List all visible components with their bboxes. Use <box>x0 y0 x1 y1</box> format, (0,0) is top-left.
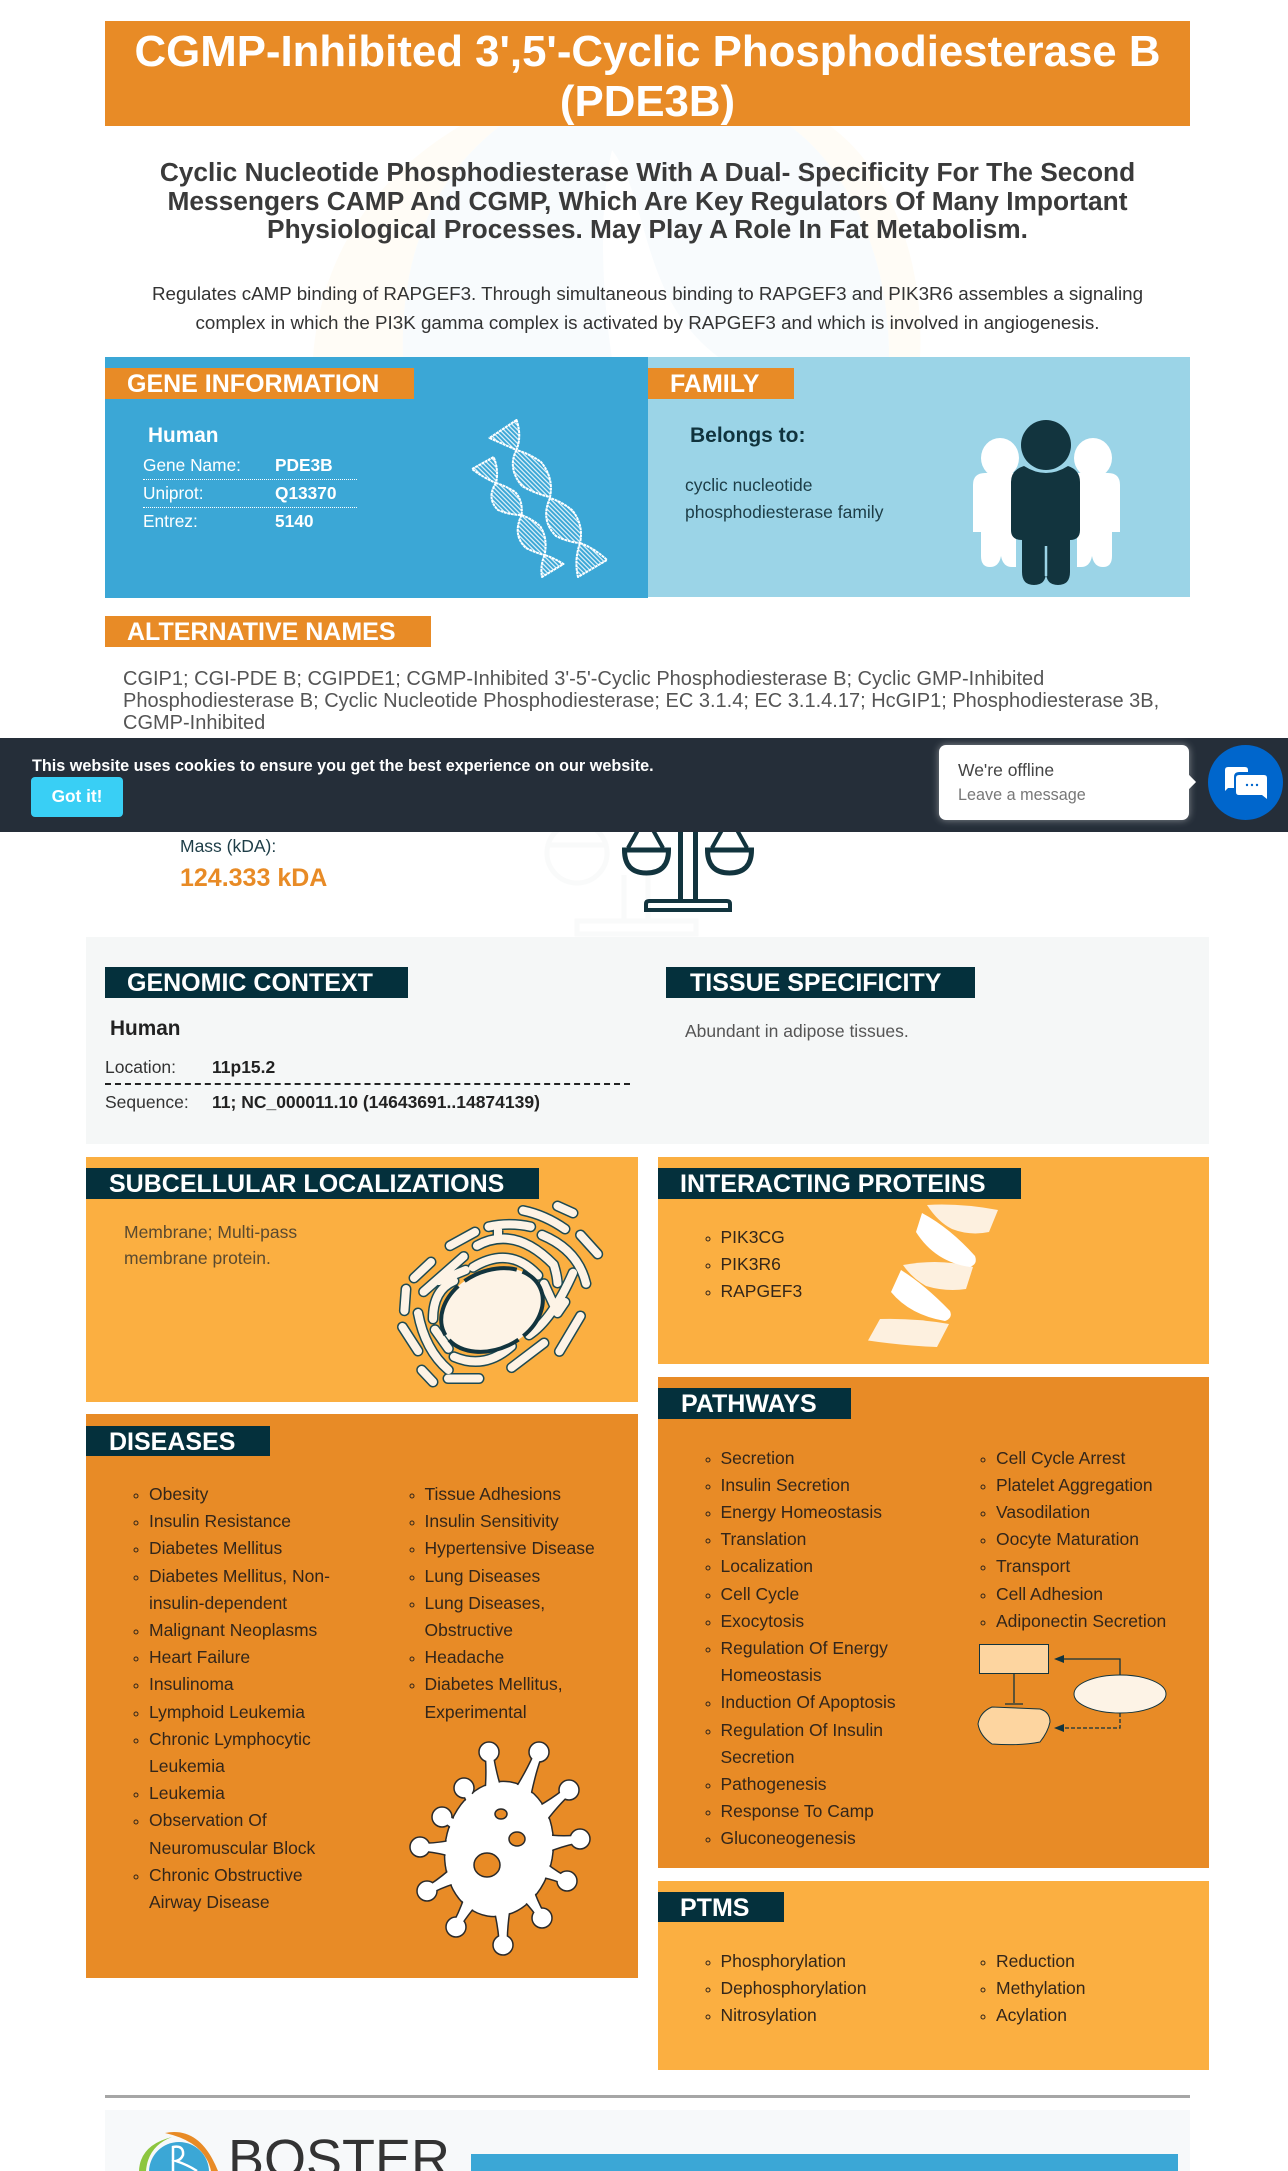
disease list: column 1: Diabetes Mellitus, Non- <box>149 1566 330 1586</box>
title: (PDE3B) <box>560 77 735 126</box>
panel: family <box>648 357 1190 597</box>
mass value: 124.333 kDA <box>180 864 327 892</box>
heading: family: FAMILY <box>670 370 759 398</box>
heading: pathways: PATHWAYS <box>681 1390 817 1418</box>
footer divider <box>105 2095 1190 2098</box>
family text <box>685 475 884 522</box>
gene name row <box>143 455 357 480</box>
gene name row: Gene Name: <box>143 455 241 475</box>
disease list: column 1: Insulin Resistance <box>149 1511 291 1531</box>
PTM list: column 1: Nitrosylation <box>720 2005 817 2025</box>
gene name row: PDE3B <box>275 455 333 475</box>
disease list: column 1: Obesity <box>149 1484 208 1504</box>
pathway list: column 1: Homeostasis <box>720 1665 822 1685</box>
pathway list: column 2: Vasodilation <box>996 1502 1090 1522</box>
chat prompt: Leave a message <box>958 786 1086 804</box>
disease list: column 2: Lung Diseases, <box>424 1593 545 1613</box>
pathway list: column 1: Insulin Secretion <box>720 1475 850 1495</box>
disease list: column 2 <box>410 1484 595 1722</box>
disease list: column 1: insulin-dependent <box>149 1593 287 1613</box>
entrez row: Entrez: <box>143 511 198 531</box>
family text: cyclic nucleotide <box>685 475 812 495</box>
localization text: Membrane; Multi-pass <box>124 1222 297 1242</box>
panel: interacting proteins <box>658 1157 1209 1364</box>
panel: footer <box>105 2110 1190 2171</box>
pathway list: column 1: Regulation Of Energy <box>720 1638 888 1658</box>
pathway list: column 1 <box>706 1448 896 1848</box>
icon: DNA helix <box>472 419 608 578</box>
location row: 11p15.2 <box>212 1057 275 1077</box>
heading: family <box>648 368 794 399</box>
pathway list: column 1: Regulation Of Insulin <box>720 1720 883 1740</box>
title: CGMP-Inhibited 3',5'-Cyclic Phosphodiesterase B <box>135 27 1160 76</box>
heading: tissue specificity: TISSUE SPECIFICITY <box>690 969 941 997</box>
location row: Location: <box>105 1057 176 1077</box>
bubble pointer <box>1182 775 1196 789</box>
footer blue banner <box>471 2154 1178 2171</box>
alternative names text: Phosphodiesterase B; Cyclic Nucleotide Phosphodiesterase; EC 3.1.4; EC 3.1.4.17; HcGIP1; Phosphodiesterase 3B, <box>123 690 1159 712</box>
heading: PTMs: PTMS <box>680 1894 749 1922</box>
pathway list: column 2: Adiponectin Secretion <box>996 1611 1166 1631</box>
subtitle: Cyclic Nucleotide Phosphodiesterase With A Dual- Specificity For The Second <box>160 157 1135 187</box>
subtitle: Messengers CAMP And CGMP, Which Are Key Regulators Of Many Important <box>167 186 1128 216</box>
pathway list: column 1: Localization <box>720 1556 813 1576</box>
localization text <box>124 1222 297 1268</box>
disease list: column 2: Tissue Adhesions <box>424 1484 561 1504</box>
pathway list: column 1: Cell Cycle <box>720 1584 799 1604</box>
icon: endoplasmic reticulum <box>397 1200 604 1388</box>
disease list: column 1: Lymphoid Leukemia <box>149 1702 305 1722</box>
pathway list: column 2: Cell Cycle Arrest <box>996 1448 1125 1468</box>
icon: group of people <box>973 420 1120 585</box>
pathway list: column 1: Induction Of Apoptosis <box>720 1692 896 1712</box>
pathway list: column 2: Cell Adhesion <box>996 1584 1103 1604</box>
pathway list: column 1: Energy Homeostasis <box>720 1502 882 1522</box>
pathway list: column 1: Translation <box>720 1529 806 1549</box>
sequence row: 11; NC_000011.10 (14643691..14874139) <box>212 1092 540 1112</box>
alternative names text: CGIP1; CGI-PDE B; CGIPDE1; CGMP-Inhibited 3'-5'-Cyclic Phosphodiesterase B; Cyclic GMP-Inhibited <box>123 668 1044 690</box>
entrez row <box>143 511 313 531</box>
logo: Boster mark <box>139 2132 218 2171</box>
chat message bubble <box>939 745 1189 820</box>
location row <box>105 1056 630 1085</box>
heading: PTMs <box>658 1892 784 1922</box>
protein list: PIK3CG <box>720 1227 785 1247</box>
panel: genomic context and tissue specificity <box>86 937 1209 1144</box>
pathway list: column 1: Gluconeogenesis <box>720 1828 856 1848</box>
heading: genomic context: GENOMIC CONTEXT <box>127 969 373 997</box>
cookie button: Got it! <box>52 786 102 806</box>
uniprot row: Q13370 <box>275 483 336 503</box>
protein list <box>706 1227 802 1301</box>
protein list: RAPGEF3 <box>720 1281 802 1301</box>
pathway list: column 1: Response To Camp <box>720 1801 874 1821</box>
disease list: column 1: Malignant Neoplasms <box>149 1620 317 1640</box>
heading: interacting proteins: INTERACTING PROTEINS <box>680 1170 986 1198</box>
disease list: column 2: Lung Diseases <box>424 1566 540 1586</box>
disease list: column 2: Experimental <box>424 1702 527 1722</box>
pathway list: column 1: Secretion <box>720 1747 794 1767</box>
panel: pathways <box>658 1377 1209 1868</box>
disease list: column 1: Observation Of <box>149 1810 267 1830</box>
panel: PTMs <box>658 1881 1209 2070</box>
heading: gene information: GENE INFORMATION <box>127 370 379 398</box>
pathway list: column 1: Pathogenesis <box>720 1774 827 1794</box>
disease list: column 2: Obstructive <box>424 1620 513 1640</box>
PTM list: column 2: Acylation <box>996 2005 1067 2025</box>
entrez row: 5140 <box>275 511 313 531</box>
disease list: column 2: Insulin Sensitivity <box>424 1511 559 1531</box>
heading: alternative names: ALTERNATIVE NAMES <box>127 618 396 646</box>
background watermark: faint logo rings <box>314 126 920 357</box>
description text: complex in which the PI3K gamma complex is activated by RAPGEF3 and which is involved in angiogenesis. <box>195 312 1100 333</box>
subtitle: Physiological Processes. May Play A Role In Fat Metabolism. <box>267 214 1028 244</box>
belongs to label: Belongs to: <box>690 424 806 447</box>
subtitle <box>160 157 1135 244</box>
disease list: column 1: Neuromuscular Block <box>149 1838 315 1858</box>
pathway list: column 1: Secretion <box>720 1448 794 1468</box>
tissue text: Abundant in adipose tissues. <box>685 1021 909 1041</box>
panel: subcellular localizations <box>86 1157 638 1402</box>
disease list: column 1: Chronic Obstructive <box>149 1865 303 1885</box>
chat status: We're offline <box>958 760 1054 780</box>
icon: virus <box>409 1741 591 1956</box>
icon: balance scale <box>622 832 754 912</box>
disease list: column 1 <box>134 1484 330 1912</box>
sequence row: Sequence: <box>105 1092 189 1112</box>
panel: gene information <box>105 357 648 598</box>
description text: Regulates cAMP binding of RAPGEF3. Through simultaneous binding to RAPGEF3 and PIK3R6 assembles a signaling <box>152 283 1143 304</box>
disease list: column 1: Leukemia <box>149 1783 225 1803</box>
panel: diseases <box>86 1414 638 1978</box>
disease list: column 2: Diabetes Mellitus, <box>424 1674 563 1694</box>
PTM list: column 1: Dephosphorylation <box>720 1978 866 1998</box>
PTM list: column 2: Reduction <box>996 1951 1075 1971</box>
PTM list: column 2: Methylation <box>996 1978 1086 1998</box>
description text <box>152 283 1143 333</box>
uniprot row <box>143 483 357 508</box>
species label: Human <box>110 1017 180 1040</box>
pathway list: column 2: Oocyte Maturation <box>996 1529 1139 1549</box>
PTM list: column 1 <box>706 1951 866 2025</box>
pathway list: column 1: Exocytosis <box>720 1611 804 1631</box>
icon: pathway diagram <box>978 1644 1166 1746</box>
cookie button <box>31 777 123 817</box>
pathway list: column 2: Platelet Aggregation <box>996 1475 1153 1495</box>
species label: Human <box>148 424 218 447</box>
title <box>105 21 1190 126</box>
heading: diseases: DISEASES <box>109 1428 235 1456</box>
disease list: column 2: Hypertensive Disease <box>424 1538 595 1558</box>
heading: diseases <box>86 1426 270 1456</box>
disease list: column 1: Leukemia <box>149 1756 225 1776</box>
PTM list: column 1: Phosphorylation <box>720 1951 846 1971</box>
mass label: Mass (kDA): <box>180 836 276 856</box>
disease list: column 1: Insulinoma <box>149 1674 234 1694</box>
chat button icon <box>1208 745 1283 820</box>
disease list: column 1: Chronic Lymphocytic <box>149 1729 311 1749</box>
heading: subcellular localizations: SUBCELLULAR LOCALIZATIONS <box>109 1170 504 1198</box>
uniprot row: Uniprot: <box>143 483 204 503</box>
disease list: column 2: Headache <box>424 1647 504 1667</box>
cookie message: This website uses cookies to ensure you get the best experience on our website. <box>32 757 654 775</box>
alternative names text: CGMP-Inhibited <box>123 712 265 734</box>
family text: phosphodiesterase family <box>685 502 883 522</box>
disease list: column 1: Diabetes Mellitus <box>149 1538 282 1558</box>
pathway list: column 2: Transport <box>996 1556 1070 1576</box>
pathway list: column 2 <box>980 1448 1166 1631</box>
localization text: membrane protein. <box>124 1248 271 1268</box>
icon: protein helix <box>868 1204 998 1347</box>
PTM list: column 2 <box>980 1951 1086 2025</box>
cookie bar <box>0 738 1288 832</box>
heading: pathways <box>658 1388 851 1419</box>
alternative names text <box>123 668 1159 734</box>
disease list: column 1: Heart Failure <box>149 1647 250 1667</box>
disease list: column 1: Airway Disease <box>149 1892 270 1912</box>
protein list: PIK3R6 <box>720 1254 781 1274</box>
